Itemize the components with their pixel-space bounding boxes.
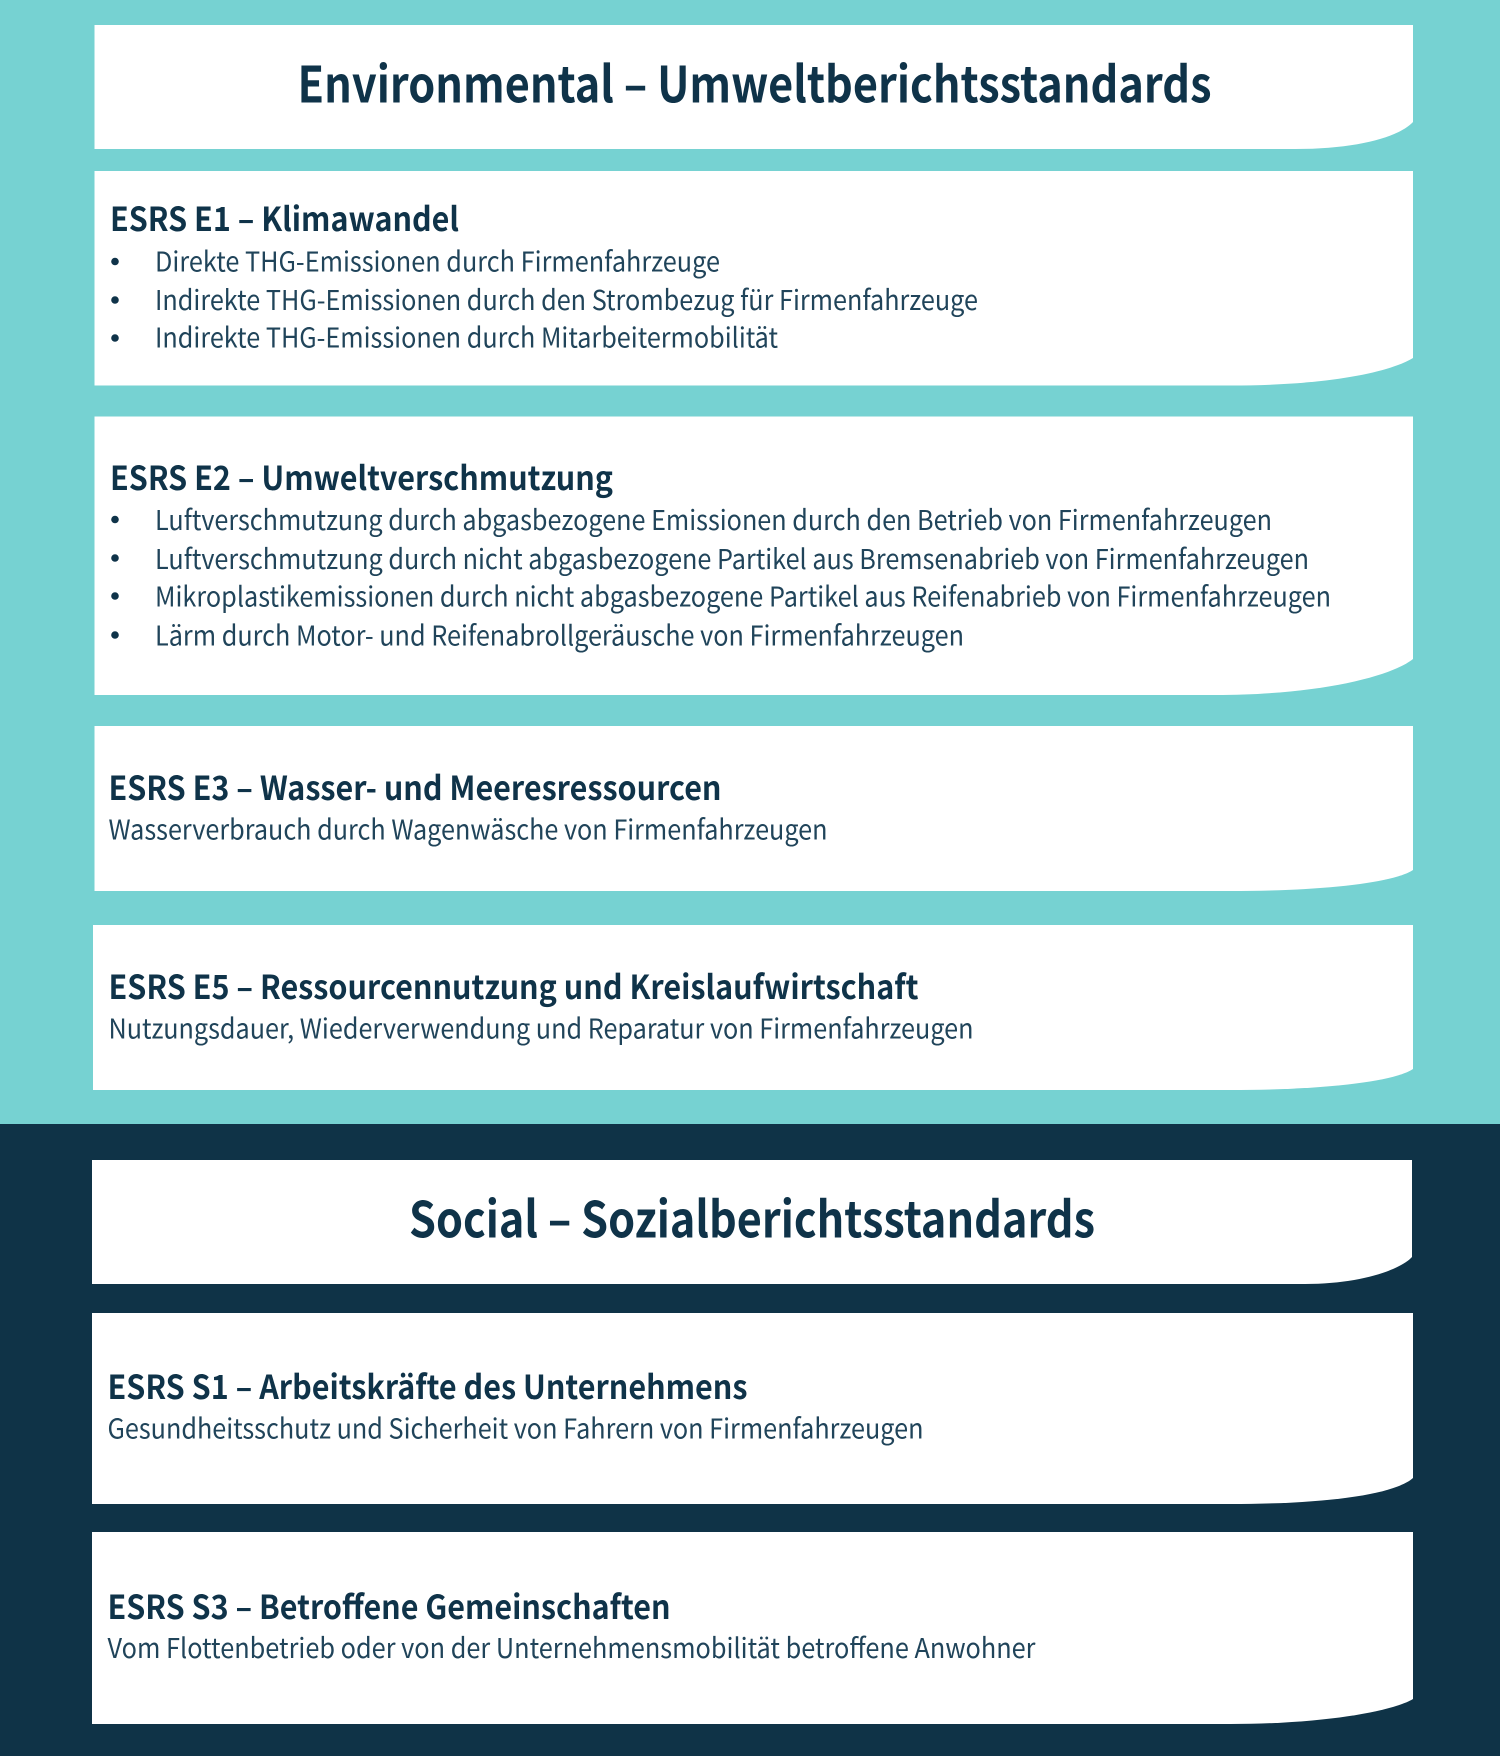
panel: environmental title: Environmental – Umweltberichtsstandards — [298, 46, 1212, 118]
panel: ESRS E3 — [94, 726, 1413, 891]
panel: ESRS E2: Lärm durch Motor- und Reifenabrollgeräusche von Firmenfahrzeugen — [155, 614, 964, 654]
panel: ESRS S1: ESRS S1 – Arbeitskräfte des Unternehmens — [108, 1361, 748, 1409]
panel: environmental title — [94, 25, 1413, 149]
panel: social title: Social – Sozialberichtsstandards — [409, 1180, 1095, 1252]
environmental section background — [0, 0, 1500, 1124]
panel: ESRS E2: Luftverschmutzung durch abgasbezogene Emissionen durch den Betrieb von Firmenfahrzeugen — [155, 498, 1272, 538]
panel: ESRS E5: ESRS E5 – Ressourcennutzung und Kreislaufwirtschaft — [108, 961, 919, 1009]
panel: ESRS S3: Vom Flottenbetrieb oder von der Unternehmensmobilität betroffene Anwohner — [108, 1626, 1036, 1666]
panel: ESRS E2 — [94, 416, 1413, 695]
panel: ESRS E1: Direkte THG-Emissionen durch Firmenfahrzeuge — [155, 240, 720, 280]
panel: ESRS S1: Gesundheitsschutz und Sicherheit von Fahrern von Firmenfahrzeugen — [108, 1406, 924, 1446]
panel: ESRS E5 — [93, 925, 1413, 1090]
panel: ESRS S3 — [92, 1532, 1413, 1724]
panel: ESRS E5: Nutzungsdauer, Wiederverwendung und Reparatur von Firmenfahrzeugen — [108, 1006, 974, 1046]
panel: ESRS E2: Mikroplastikemissionen durch nicht abgasbezogene Partikel aus Reifenabrieb von Firmenfahrzeugen — [155, 574, 1331, 614]
panel: ESRS E3: ESRS E3 – Wasser- und Meeresressourcen — [108, 762, 722, 810]
panel: ESRS E1: Indirekte THG-Emissionen durch den Strombezug für Firmenfahrzeuge — [155, 278, 978, 318]
panel: ESRS E2: ESRS E2 – Umweltverschmutzung — [110, 452, 613, 500]
panel: ESRS E3: Wasserverbrauch durch Wagenwäsche von Firmenfahrzeugen — [108, 808, 828, 848]
panel: ESRS E2: Luftverschmutzung durch nicht abgasbezogene Partikel aus Bremsenabrieb von Firmenfahrzeugen — [155, 537, 1309, 577]
panel: ESRS E1: ESRS E1 – Klimawandel — [110, 193, 459, 241]
social section background — [0, 1124, 1500, 1756]
panel: ESRS E1 — [94, 171, 1413, 386]
panel: ESRS S1 — [92, 1313, 1413, 1504]
panel: social title — [92, 1160, 1412, 1284]
panel: ESRS S3: ESRS S3 – Betroffene Gemeinschaften — [108, 1581, 670, 1629]
panel: ESRS E1: Indirekte THG-Emissionen durch Mitarbeitermobilität — [155, 316, 778, 356]
